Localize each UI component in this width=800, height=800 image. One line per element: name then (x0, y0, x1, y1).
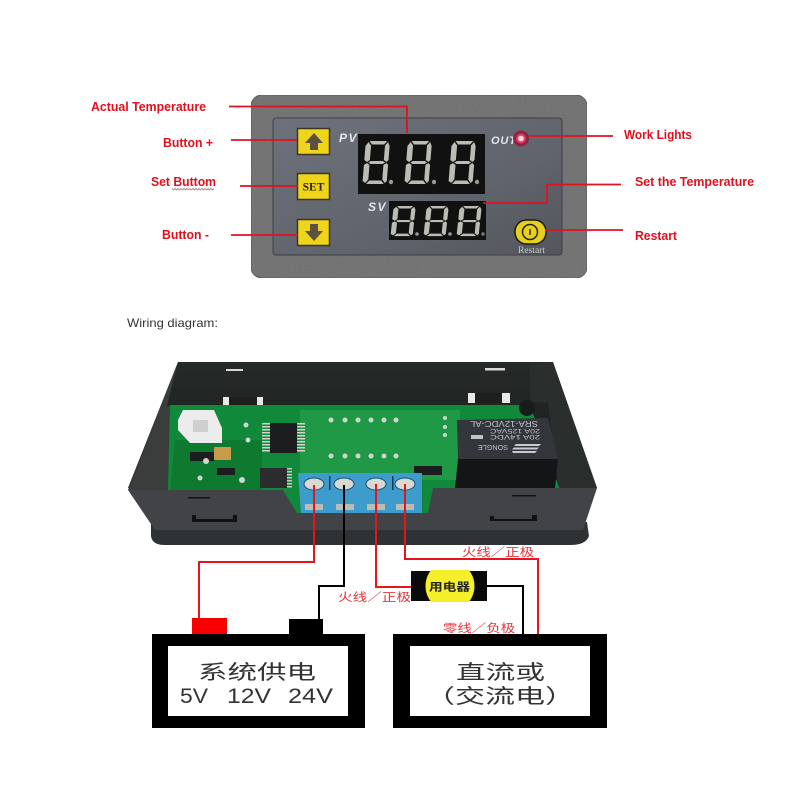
display driver chip (260, 468, 289, 488)
PV label: PV (339, 131, 358, 145)
front wall latches (188, 495, 537, 522)
label: Actual Temperature: Actual Temperature (91, 100, 206, 114)
voltages (180, 685, 333, 708)
box title: 系统供电 (198, 661, 316, 684)
label: Work Lights: Work Lights (624, 128, 692, 142)
circuit board (168, 400, 560, 515)
box body (393, 634, 607, 728)
right inner wall (530, 362, 597, 488)
relay: SONGLE (478, 443, 508, 450)
negative terminal (289, 619, 323, 635)
display faceplate (273, 118, 562, 255)
load component: 用电器 (429, 580, 470, 594)
blue terminal block (298, 473, 422, 513)
label: live positive lower: 火线／正极 (338, 590, 412, 604)
power supply box (152, 618, 365, 728)
front wall (128, 488, 597, 530)
solder pads (198, 416, 447, 483)
wire: source live (405, 484, 538, 635)
tan capacitor (214, 447, 231, 460)
white connector (178, 410, 222, 443)
label: Button -: Button - (162, 228, 209, 242)
box title: 直流或 (456, 661, 545, 684)
voltages: 24V (288, 685, 333, 708)
voltages: 5V (180, 685, 208, 708)
relay: 20A 125VAC (489, 427, 540, 433)
button up (298, 128, 330, 154)
button set (298, 174, 330, 200)
label: neutral negative: 零线／负极 (443, 621, 516, 635)
label: live positive upper: 火线／正极 (462, 545, 535, 559)
label: Set Buttom: Set Buttom (151, 175, 216, 189)
positive terminal (192, 618, 227, 635)
relay: 20A 14VDC (489, 433, 540, 439)
back wall (128, 362, 597, 488)
button set: SET (303, 182, 325, 194)
mounting tabs (223, 368, 510, 406)
wire: load live (376, 484, 412, 587)
panel: controller front view (251, 95, 587, 278)
label: Restart: Restart (635, 229, 678, 243)
SV display (389, 201, 486, 240)
heading: wiring diagram: Wiring diagram: (127, 316, 218, 330)
voltages: 12V (227, 685, 271, 708)
bottom flange (151, 522, 589, 545)
box subtitle: （交流电） (425, 685, 575, 708)
panel: controller rear photo (128, 362, 597, 545)
small components (190, 452, 442, 475)
OUT label: OUT (491, 135, 517, 147)
box body (152, 634, 365, 728)
button down (298, 220, 330, 246)
restart label: Restart (518, 245, 546, 255)
wire: supply positive (199, 485, 314, 619)
left inner wall (128, 362, 180, 490)
work light LED (513, 130, 529, 146)
main chip (266, 423, 301, 453)
restart button (515, 220, 546, 244)
load component (411, 570, 487, 602)
callout lines (229, 106, 623, 235)
SV label: SV (368, 200, 387, 214)
wires (199, 484, 538, 635)
PV display (358, 134, 485, 194)
relay: SRA-12VDC-AL (469, 419, 538, 428)
mains box (393, 634, 607, 728)
label: Set the Temperature: Set the Temperature (635, 175, 754, 189)
device case (251, 95, 587, 278)
relay (455, 418, 558, 488)
wire: supply negative (319, 485, 344, 620)
wire: load neutral (486, 586, 523, 635)
label: Button +: Button + (163, 136, 213, 150)
